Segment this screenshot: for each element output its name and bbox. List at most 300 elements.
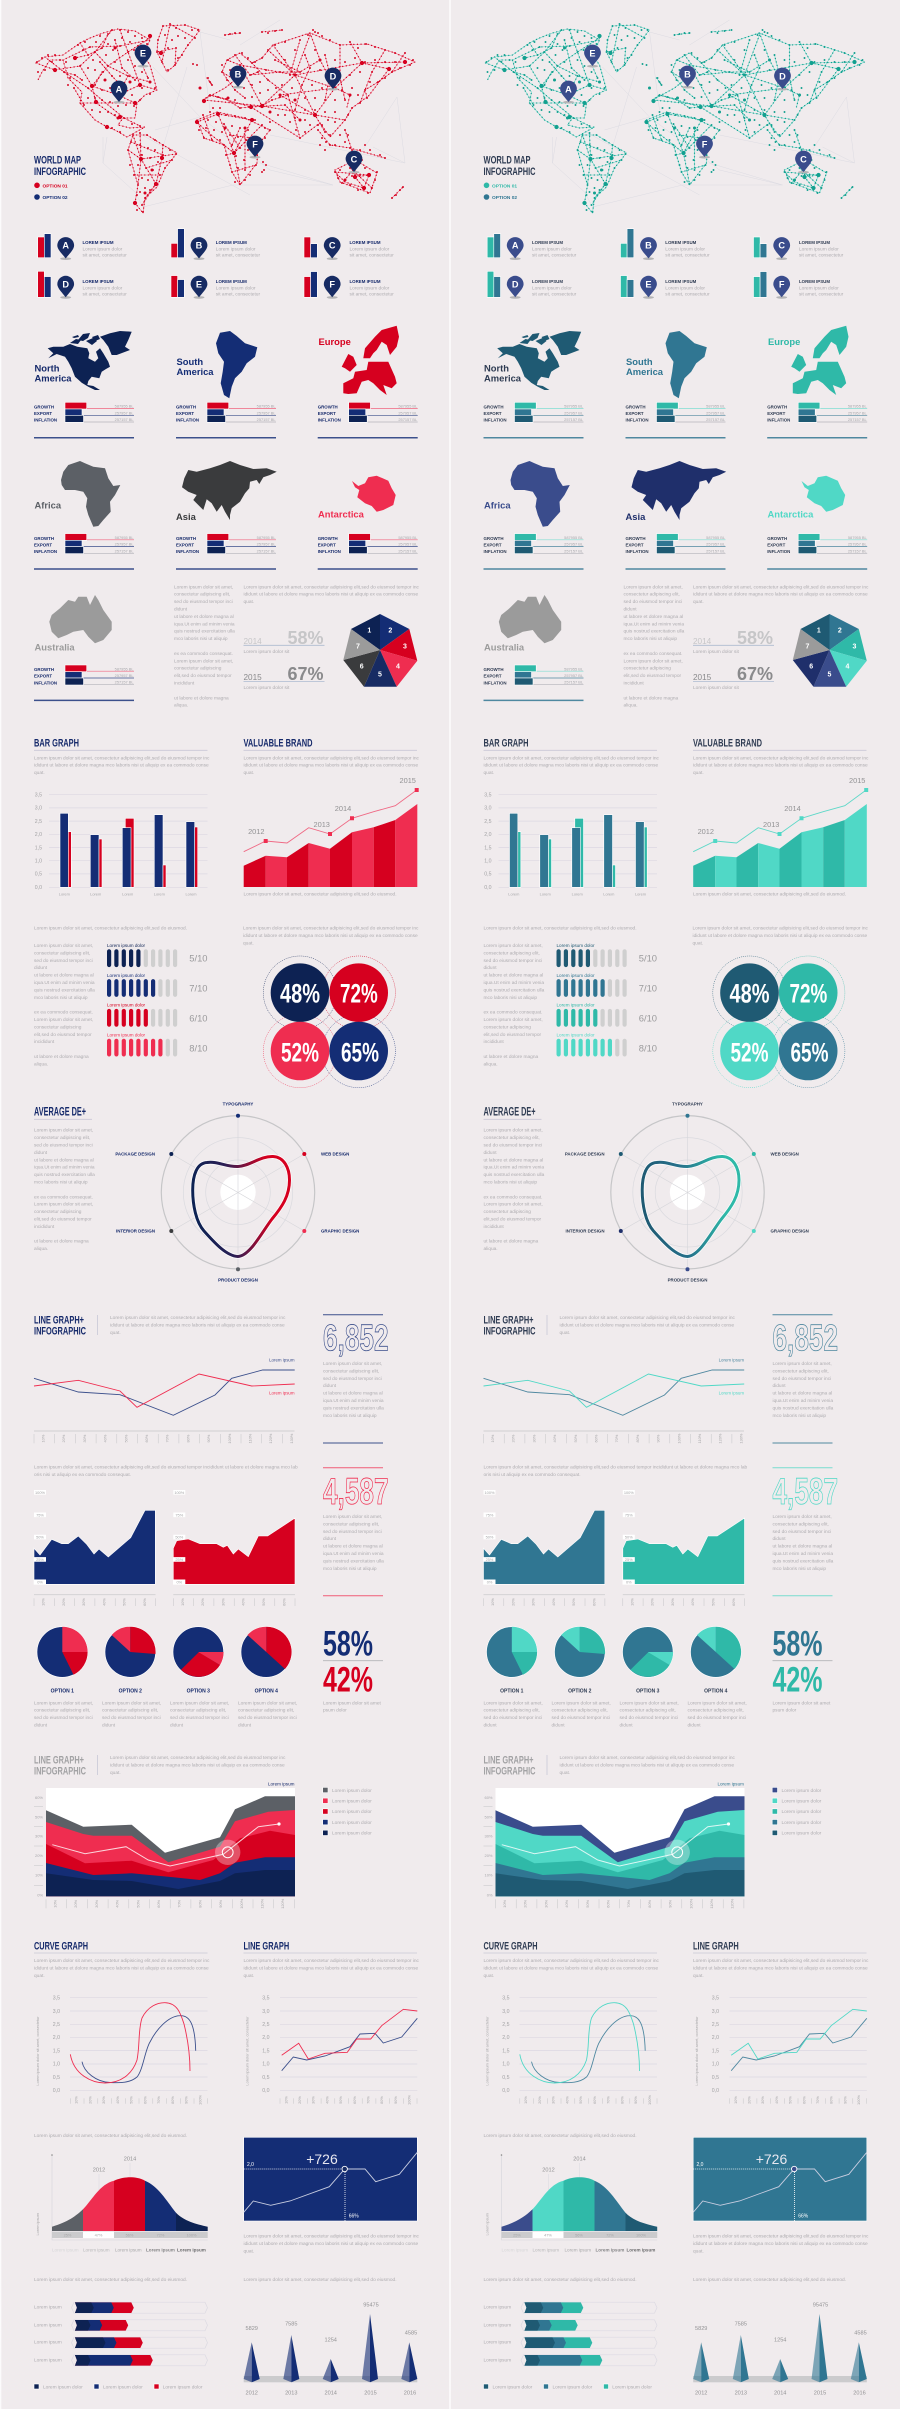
area charts: 50% bbox=[122, 1598, 127, 1606]
continent: Asia: Asia bbox=[626, 511, 646, 522]
curve graph: 20% bbox=[87, 2096, 92, 2104]
cone chart: 2016 bbox=[404, 2390, 416, 2396]
continent: Australia: GROWTH bbox=[484, 667, 504, 672]
cone chart: 1254 bbox=[774, 2338, 786, 2344]
text block with year stats: Lorem ipsum dolor sit bbox=[693, 685, 740, 691]
line graph: 1,5 bbox=[262, 2048, 270, 2054]
continent: Australia: EXPORT bbox=[34, 674, 52, 679]
continent: Africa: 587955 BL bbox=[564, 535, 584, 540]
text column: Lorem ipsum dolor sit amet, bbox=[174, 658, 233, 664]
pie charts: OPTION 1 bbox=[51, 1689, 74, 1695]
stacked area chart: 90% bbox=[218, 1899, 223, 1908]
location key grid: B bbox=[645, 241, 652, 251]
continent: North America: GROWTH bbox=[34, 404, 54, 410]
text column with caption: didunt bbox=[34, 965, 48, 971]
continent: Asia: 257957 BL bbox=[257, 542, 276, 547]
stacked chart legend: Lorem ipsum dolor bbox=[782, 1809, 822, 1815]
pill rating rows bbox=[556, 943, 657, 1054]
location key grid: sit amet, consectetur bbox=[665, 292, 710, 298]
line graph heading: ididunt ut labore et dolore magna mco laboris nisi ut aliquip ex ea commodo conse bbox=[110, 1322, 285, 1328]
pie charts: consectetur adipiscing elit, bbox=[102, 1708, 158, 1714]
chevron progress bars: Lorem ipsum dolor bbox=[163, 2384, 203, 2390]
location key grid: Lorem ipsum dolor bbox=[350, 247, 390, 253]
pill rating rows: 8/10 bbox=[189, 1043, 208, 1054]
line graph: ididunt ut labore et dolore magna mco laboris nisi ut aliquip ex ea commodo conse bbox=[693, 1966, 868, 1972]
line graph: 70% bbox=[366, 2096, 370, 2104]
bell curve chart: 72% bbox=[606, 2232, 614, 2238]
average heading and text: sed do eiusmod tempor inci bbox=[34, 1142, 93, 1148]
line graph: 20% bbox=[297, 2096, 302, 2104]
curve graph: 3,5 bbox=[502, 1996, 510, 2002]
text block with year stats: quat. bbox=[244, 599, 254, 605]
heptagon chart bbox=[793, 614, 867, 687]
stat: 6,852: ut labore et dolore magna al bbox=[772, 1391, 832, 1397]
bell curve chart: Lorem ipsum bbox=[502, 2247, 528, 2252]
continent: Antarctica: EXPORT bbox=[318, 542, 336, 547]
curve graph: CURVE GRAPH bbox=[34, 1940, 88, 1952]
stat: 4,587: didunt bbox=[323, 1536, 337, 1542]
continent: North America: 257957 BL bbox=[564, 410, 584, 415]
continent: North America: 587955 BL bbox=[115, 404, 134, 409]
radar chart: PRODUCT DESIGN bbox=[218, 1278, 258, 1283]
area charts: 10% bbox=[40, 1598, 46, 1606]
stacked area chart: 110% bbox=[260, 1898, 264, 1909]
text block with year stats: 2015 bbox=[244, 673, 262, 682]
area charts: 30% bbox=[670, 1598, 675, 1606]
text block with year stats: Lorem ipsum dolor sit bbox=[244, 685, 290, 691]
continent: Australia: 257957 BL bbox=[115, 673, 134, 678]
continent: North America: INFLATION bbox=[34, 418, 57, 423]
text column: consectetur adipiscing bbox=[624, 666, 671, 672]
location key grid: sit amet, consectetur bbox=[799, 253, 844, 259]
world map bbox=[486, 20, 864, 213]
pill rating rows bbox=[107, 943, 208, 1054]
curve graph: 2,0 bbox=[53, 2035, 60, 2041]
world map: D bbox=[330, 71, 337, 81]
average heading and text: didunt bbox=[34, 1150, 48, 1156]
cone chart: 2012 bbox=[695, 2390, 707, 2396]
pie charts: Lorem ipsum dolor sit amet, bbox=[484, 1700, 543, 1706]
pill rating rows: 7/10 bbox=[639, 983, 657, 994]
heptagon chart: 7 bbox=[356, 644, 360, 650]
pie charts bbox=[34, 1627, 297, 1728]
stacked area chart: 60% bbox=[606, 1899, 610, 1908]
pie charts: Lorem ipsum dolor sit amet, bbox=[620, 1700, 679, 1706]
location key grid: sit amet, consectetur bbox=[216, 253, 260, 259]
pie charts: OPTION 4 bbox=[704, 1689, 728, 1695]
map title and legend bbox=[34, 154, 86, 201]
area charts: 100% bbox=[485, 1490, 495, 1495]
area charts: 20% bbox=[61, 1598, 66, 1606]
text column with caption: ut labore et dolore magna bbox=[484, 1054, 538, 1060]
stacked area chart: 80% bbox=[197, 1899, 202, 1908]
continent: South America: 587955 BL bbox=[706, 404, 726, 409]
bell curve chart: 25% bbox=[64, 2232, 72, 2238]
continent: Australia: EXPORT bbox=[484, 674, 502, 679]
curve graph: quat. bbox=[484, 1973, 494, 1979]
world map: F bbox=[252, 139, 258, 149]
heptagon chart: 6 bbox=[360, 664, 364, 670]
area charts: 60% bbox=[281, 1598, 286, 1606]
pie charts: didunt bbox=[620, 1722, 633, 1728]
world map: E bbox=[589, 48, 596, 58]
pie charts: OPTION 2 bbox=[119, 1689, 142, 1695]
stacked area chart: 10% bbox=[52, 1899, 58, 1908]
pie charts: didunt bbox=[238, 1722, 252, 1728]
text column: consectetur adipiscing elit, bbox=[624, 592, 680, 598]
bell curve chart: 72% bbox=[157, 2232, 165, 2238]
text column with caption: Lorem ipsum dolor sit amet, bbox=[34, 943, 93, 949]
world map: A bbox=[565, 84, 572, 94]
curve graph: 3,0 bbox=[502, 2009, 510, 2015]
stat: 58% and 42%: Lorem ipsum dolor sit amet bbox=[323, 1700, 382, 1706]
average heading and text: Lorem ipsum dolor sit amet, bbox=[484, 1128, 543, 1134]
heading: valuable brand: VALUABLE BRAND bbox=[244, 738, 313, 750]
bell curve chart: 2014 bbox=[573, 2156, 586, 2162]
location key grid: E bbox=[645, 279, 652, 289]
continent: Australia bbox=[34, 595, 134, 700]
radar chart: WEB DESIGN bbox=[770, 1152, 799, 1157]
text block with year stats: ididunt ut labore et dolore magna mco laboris nisi ut aliquip ex ea commodo conse bbox=[244, 592, 418, 598]
area charts: 10% bbox=[629, 1598, 634, 1606]
text column with caption: consectetur adipiscing bbox=[484, 1024, 531, 1030]
area chart: valuable brand bbox=[244, 776, 419, 898]
continent: Africa: INFLATION bbox=[484, 549, 507, 554]
pie charts: OPTION 2 bbox=[568, 1689, 592, 1695]
heading: valuable brand bbox=[693, 738, 869, 776]
location key grid: Lorem ipsum dolor bbox=[82, 286, 123, 292]
continent: Asia: 587955 BL bbox=[706, 535, 726, 540]
stat: 6,852: sed do eiusmod tempor inci bbox=[772, 1376, 831, 1382]
continent: Australia bbox=[484, 595, 584, 700]
curve graph: 60% bbox=[142, 2096, 147, 2104]
stacked chart legend: Lorem ipsum dolor bbox=[332, 1798, 372, 1804]
heptagon chart: 3 bbox=[853, 644, 857, 650]
highlighted line chart box: quat. bbox=[693, 2248, 704, 2254]
bell curve chart bbox=[34, 2133, 208, 2252]
location key grid: F bbox=[779, 279, 785, 289]
curve graph: 90% bbox=[184, 2096, 188, 2104]
continent: North America: 587955 BL bbox=[564, 404, 584, 409]
line graph: 0,0 bbox=[712, 2088, 719, 2094]
line graph: 3,0 bbox=[712, 2009, 719, 2015]
text column with caption: iqua.Ut enim ad minim venia bbox=[34, 980, 95, 986]
average heading and text bbox=[484, 1107, 545, 1252]
stat: 6,852: mco laboris nisi ut aliquip bbox=[772, 1413, 826, 1419]
location key grid: LOREM IPSUM bbox=[216, 240, 247, 245]
location key grid: sit amet, consectetur bbox=[665, 253, 710, 259]
area charts: oris nisi ut aliquip ex ea commodo consequat. bbox=[34, 1472, 131, 1478]
line graph: 2,5 bbox=[262, 2022, 270, 2028]
stacked area chart: 100% bbox=[688, 1898, 693, 1909]
pie charts: sed do eiusmod tempor inci bbox=[620, 1715, 678, 1721]
radar chart: INTERIOR DESIGN bbox=[116, 1229, 155, 1234]
continent: Asia: GROWTH bbox=[626, 536, 646, 541]
stat: 6,852: sed do eiusmod tempor inci bbox=[323, 1376, 382, 1382]
line chart: 80% bbox=[635, 1434, 640, 1442]
average heading and text: quis nostrud exercitation ulla bbox=[34, 1172, 95, 1178]
percent circles: 48% bbox=[730, 979, 770, 1009]
location key grid: LOREM IPSUM bbox=[665, 240, 697, 245]
area charts: 10% bbox=[490, 1598, 495, 1606]
curve graph: quat. bbox=[34, 1973, 45, 1979]
text block with year stats: Lorem ipsum dolor sit bbox=[693, 649, 740, 655]
average heading and text: Lorem ipsum dolor sit amet, bbox=[34, 1202, 93, 1208]
stacked area heading: Lorem ipsum dolor sit amet, consectetur adipisicing elit,sed do eiusmod tempor inc bbox=[110, 1755, 286, 1761]
location key grid: A bbox=[62, 241, 69, 251]
line graph: 100% bbox=[856, 2094, 861, 2105]
bell curve chart: Lorem ipsum bbox=[35, 2213, 40, 2236]
average heading and text: iqua.Ut enim ad minim venia bbox=[34, 1165, 95, 1171]
text column with caption: consectetur adipiscing elit, bbox=[34, 950, 90, 956]
line chart: 60% bbox=[594, 1434, 598, 1442]
chevron progress bars: Lorem ipsum bbox=[34, 2305, 62, 2311]
continent: Africa: 257957 BL bbox=[564, 542, 584, 547]
chevron progress bars: Lorem ipsum bbox=[34, 2322, 62, 2328]
stacked area heading: quat. bbox=[110, 1770, 121, 1776]
line chart: Lorem ipsum bbox=[719, 1357, 744, 1362]
map title and legend: OPTION 02 bbox=[492, 195, 517, 201]
stacked area chart: 90% bbox=[668, 1899, 673, 1908]
line chart: 30% bbox=[82, 1434, 87, 1442]
area charts: 40% bbox=[690, 1598, 695, 1606]
world map: D bbox=[779, 71, 786, 81]
cone chart: 2015 bbox=[364, 2390, 377, 2396]
line chart: 50% bbox=[123, 1434, 128, 1442]
pie charts: consectetur adipiscing elit, bbox=[238, 1708, 294, 1714]
text column with caption: didunt bbox=[484, 965, 497, 971]
bar chart: Lorem bbox=[59, 892, 70, 897]
area charts: 75% bbox=[36, 1512, 44, 1517]
area charts: 25% bbox=[625, 1557, 633, 1562]
continent: North America: EXPORT bbox=[484, 411, 502, 416]
curve graph bbox=[34, 1940, 210, 2105]
chevron progress bars: Lorem ipsum dolor bbox=[43, 2384, 83, 2390]
continent: Africa: EXPORT bbox=[34, 542, 52, 547]
bar chart: 0,0 bbox=[484, 885, 492, 891]
line chart: 110% bbox=[248, 1433, 252, 1443]
text block with year stats bbox=[693, 584, 869, 691]
average heading and text: mco laboris nisi ut aliquip bbox=[484, 1180, 537, 1186]
continent: Antarctica bbox=[318, 476, 418, 569]
stat: 4,587: mco laboris nisi ut aliquip bbox=[772, 1566, 826, 1572]
line chart: 90% bbox=[656, 1434, 661, 1442]
map title and legend: INFOGRAPHIC bbox=[34, 166, 86, 178]
stat: 58% and 42%: 42% bbox=[323, 1661, 373, 1700]
text column with caption: aliqua. bbox=[34, 1061, 48, 1067]
text column with caption bbox=[34, 926, 187, 1067]
stat: 58% and 42%: psum dolor bbox=[772, 1708, 797, 1714]
percent circles: 65% bbox=[790, 1038, 828, 1068]
continent: Antarctica: Antarctica bbox=[768, 508, 814, 519]
location key grid: LOREM IPSUM bbox=[532, 279, 563, 284]
continent: Asia: INFLATION bbox=[626, 549, 649, 554]
stat: 4,587: Lorem ipsum dolor sit amet, bbox=[323, 1514, 382, 1520]
heptagon chart: 2 bbox=[388, 628, 392, 634]
continent: Africa: 257157 BL bbox=[115, 548, 134, 553]
stacked area heading bbox=[34, 1754, 286, 1778]
stat: 58% and 42%: psum dolor bbox=[323, 1708, 347, 1714]
continent: Africa: INFLATION bbox=[34, 549, 57, 554]
bell curve chart: Lorem ipsum bbox=[484, 2213, 489, 2236]
stacked area chart: 0% bbox=[487, 1893, 493, 1898]
continent: North America: America bbox=[34, 373, 72, 384]
average heading and text: consectetur adipiscing bbox=[484, 1209, 531, 1215]
continent: Asia: 587955 BL bbox=[257, 535, 276, 540]
text column: elit,sed do eiusmod tempor bbox=[624, 673, 681, 679]
pie charts: consectetur adipiscing elit, bbox=[484, 1708, 540, 1714]
text column with caption: iqua.Ut enim ad minim venia bbox=[484, 980, 544, 986]
continent: Australia: 257157 BL bbox=[564, 680, 584, 685]
curve graph: 50% bbox=[128, 2096, 134, 2104]
average heading and text: elit,sed do eiusmod tempor bbox=[34, 1216, 92, 1222]
location key grid: C bbox=[778, 241, 785, 251]
location key grid: LOREM IPSUM bbox=[216, 279, 247, 284]
area chart: valuable brand: 2013 bbox=[313, 820, 330, 829]
line chart: 110% bbox=[697, 1433, 702, 1443]
text block with year stats: Lorem ipsum dolor sit amet, consectetur adipisicing elit,sed do eiusmod tempor inc bbox=[244, 584, 420, 590]
curve graph: 10% bbox=[523, 2096, 528, 2104]
stat: 4,587 bbox=[772, 1468, 838, 1596]
bar chart: 1,0 bbox=[35, 858, 42, 864]
average heading and text: Lorem ipsum dolor sit amet, bbox=[484, 1202, 543, 1208]
stat: 6,852: didunt bbox=[772, 1383, 786, 1389]
pie charts: Lorem ipsum dolor sit amet, bbox=[552, 1700, 611, 1706]
stat: 4,587: mco laboris nisi ut aliquip bbox=[323, 1566, 377, 1572]
percent circles: 72% bbox=[340, 979, 378, 1009]
stat: 6,852: iqua.Ut enim ad minim venia bbox=[772, 1398, 833, 1404]
bell curve chart: 2012 bbox=[542, 2168, 555, 2174]
curve graph: 3,0 bbox=[53, 2009, 60, 2015]
line chart: Lorem ipsum bbox=[719, 1391, 744, 1396]
location key grid: LOREM IPSUM bbox=[350, 240, 381, 245]
text column: quis nostrud exercitation ulla bbox=[174, 629, 235, 635]
location key grid: Lorem ipsum dolor bbox=[82, 247, 123, 253]
curve graph: 50% bbox=[578, 2096, 583, 2104]
pie charts: didunt bbox=[688, 1722, 701, 1728]
line graph: 50% bbox=[788, 2096, 793, 2104]
heading: valuable brand: Lorem ipsum dolor sit amet, consectetur adipisicing elit,sed do eiusmod tempor inc bbox=[693, 755, 869, 761]
curve graph: 40% bbox=[564, 2096, 569, 2104]
average heading and text: quis nostrud exercitation ulla bbox=[484, 1172, 545, 1178]
bar chart: Lorem bbox=[122, 892, 133, 897]
continent: North America: 257157 BL bbox=[115, 417, 134, 422]
heading: bar graph: ididunt ut labore et dolore magna mco laboris nisi ut aliquip ex ea commodo conse bbox=[34, 763, 209, 769]
line chart: 20% bbox=[511, 1434, 516, 1442]
continent: South America: EXPORT bbox=[626, 411, 644, 416]
text column: Lorem ipsum dolor sit amet, bbox=[174, 584, 233, 590]
heptagon chart: 4 bbox=[396, 664, 400, 670]
highlighted line chart box: 66% bbox=[349, 2213, 359, 2219]
area charts: 25% bbox=[486, 1557, 494, 1562]
continent: North America: EXPORT bbox=[34, 411, 52, 416]
continent: South America: GROWTH bbox=[176, 404, 196, 410]
pill rating rows: Lorem ipsum dolor bbox=[107, 1032, 146, 1037]
percent circles: quat. bbox=[692, 940, 703, 946]
chevron progress bars: Lorem ipsum dolor bbox=[492, 2384, 533, 2390]
location key grid: sit amet, consectetur bbox=[216, 292, 260, 298]
location key grid: Lorem ipsum dolor bbox=[216, 286, 256, 292]
bell curve chart: 100% bbox=[187, 2232, 197, 2238]
area charts: 60% bbox=[731, 1598, 736, 1606]
stat: 6,852: Lorem ipsum dolor sit amet, bbox=[323, 1361, 382, 1367]
bell curve chart: Lorem ipsum dolor sit amet, consectetur adipisicing elit,sed do eiusmod. bbox=[34, 2133, 187, 2139]
line graph: quat. bbox=[244, 1973, 254, 1979]
heptagon chart: 5 bbox=[828, 672, 832, 678]
heptagon chart: 1 bbox=[367, 628, 371, 634]
stat: 6,852: mco laboris nisi ut aliquip bbox=[323, 1413, 377, 1419]
stacked area chart: 20% bbox=[523, 1899, 528, 1908]
map title and legend: OPTION 01 bbox=[42, 183, 68, 189]
stacked area chart: 10% bbox=[484, 1872, 493, 1878]
continent: Africa: GROWTH bbox=[484, 536, 504, 541]
line graph: LINE GRAPH bbox=[693, 1940, 739, 1952]
continent: Europe: INFLATION bbox=[767, 418, 790, 423]
cone chart: 2013 bbox=[735, 2390, 747, 2396]
average heading and text: incididunt bbox=[484, 1224, 504, 1230]
chevron progress bars: Lorem ipsum bbox=[34, 2340, 62, 2346]
curve graph: 0,0 bbox=[502, 2088, 510, 2094]
continent: Asia: EXPORT bbox=[626, 542, 644, 547]
pill rating rows: 5/10 bbox=[639, 953, 657, 964]
continent: Europe: 257157 BL bbox=[398, 417, 418, 422]
pie charts: OPTION 3 bbox=[187, 1689, 210, 1695]
continent: Asia bbox=[626, 461, 726, 569]
highlighted line chart box: ididunt ut labore et dolore magna mco laboris nisi ut aliquip ex ea commodo conse bbox=[693, 2241, 868, 2247]
text column with caption: ex ea commodo consequat. bbox=[34, 1010, 93, 1016]
world map: F bbox=[702, 139, 708, 149]
stat: 58% and 42%: 58% bbox=[323, 1625, 373, 1664]
stacked area chart: 20% bbox=[73, 1899, 78, 1908]
radar chart: TYPOGRAPHY bbox=[672, 1102, 703, 1107]
average heading and text: ut labore et dolore magna bbox=[484, 1239, 538, 1245]
line chart: 70% bbox=[165, 1434, 170, 1442]
text column: aliqua. bbox=[624, 703, 638, 709]
area chart: valuable brand: 2015 bbox=[399, 776, 416, 785]
line chart: 80% bbox=[185, 1434, 190, 1442]
continent: South America: 257957 BL bbox=[257, 410, 276, 415]
average heading and text: consectetur adipiscing bbox=[34, 1209, 82, 1215]
curve graph: 40% bbox=[115, 2096, 120, 2104]
line chart: Lorem ipsum bbox=[269, 1391, 295, 1396]
text block with year stats: Lorem ipsum dolor sit bbox=[244, 649, 290, 655]
pill rating rows: Lorem ipsum dolor bbox=[556, 1003, 595, 1008]
curve graph: 10% bbox=[74, 2096, 78, 2104]
chevron progress bars: Lorem ipsum dolor sit amet, consectetur adipisicing elit,sed do eiusmod. bbox=[34, 2277, 187, 2283]
pie charts bbox=[484, 1627, 747, 1728]
area charts: 60% bbox=[142, 1598, 147, 1606]
stat: 6,852 bbox=[772, 1315, 838, 1443]
chevron progress bars: Lorem ipsum bbox=[34, 2357, 62, 2363]
continent: South America: 257957 BL bbox=[706, 410, 726, 415]
continent: Asia: 257157 BL bbox=[706, 548, 726, 553]
pill rating rows: 6/10 bbox=[189, 1013, 208, 1024]
line graph heading: INFOGRAPHIC bbox=[484, 1326, 536, 1338]
location key grid: Lorem ipsum dolor bbox=[350, 286, 390, 292]
bell curve chart: 25% bbox=[513, 2232, 521, 2238]
bar chart: Lorem bbox=[603, 892, 614, 897]
pill rating rows: Lorem ipsum dolor bbox=[556, 1032, 595, 1037]
continent: Europe: EXPORT bbox=[767, 411, 786, 416]
cone chart bbox=[244, 2277, 417, 2396]
text column: ut labore et dolore magna al bbox=[174, 614, 234, 620]
curve graph: 100% bbox=[197, 2094, 202, 2105]
continent: Asia: INFLATION bbox=[176, 549, 199, 554]
stat: 6,852: consectetur adipiscing elit, bbox=[323, 1368, 379, 1374]
line graph bbox=[244, 1940, 420, 2105]
line chart: 90% bbox=[206, 1434, 211, 1442]
area charts: 50% bbox=[36, 1535, 44, 1540]
